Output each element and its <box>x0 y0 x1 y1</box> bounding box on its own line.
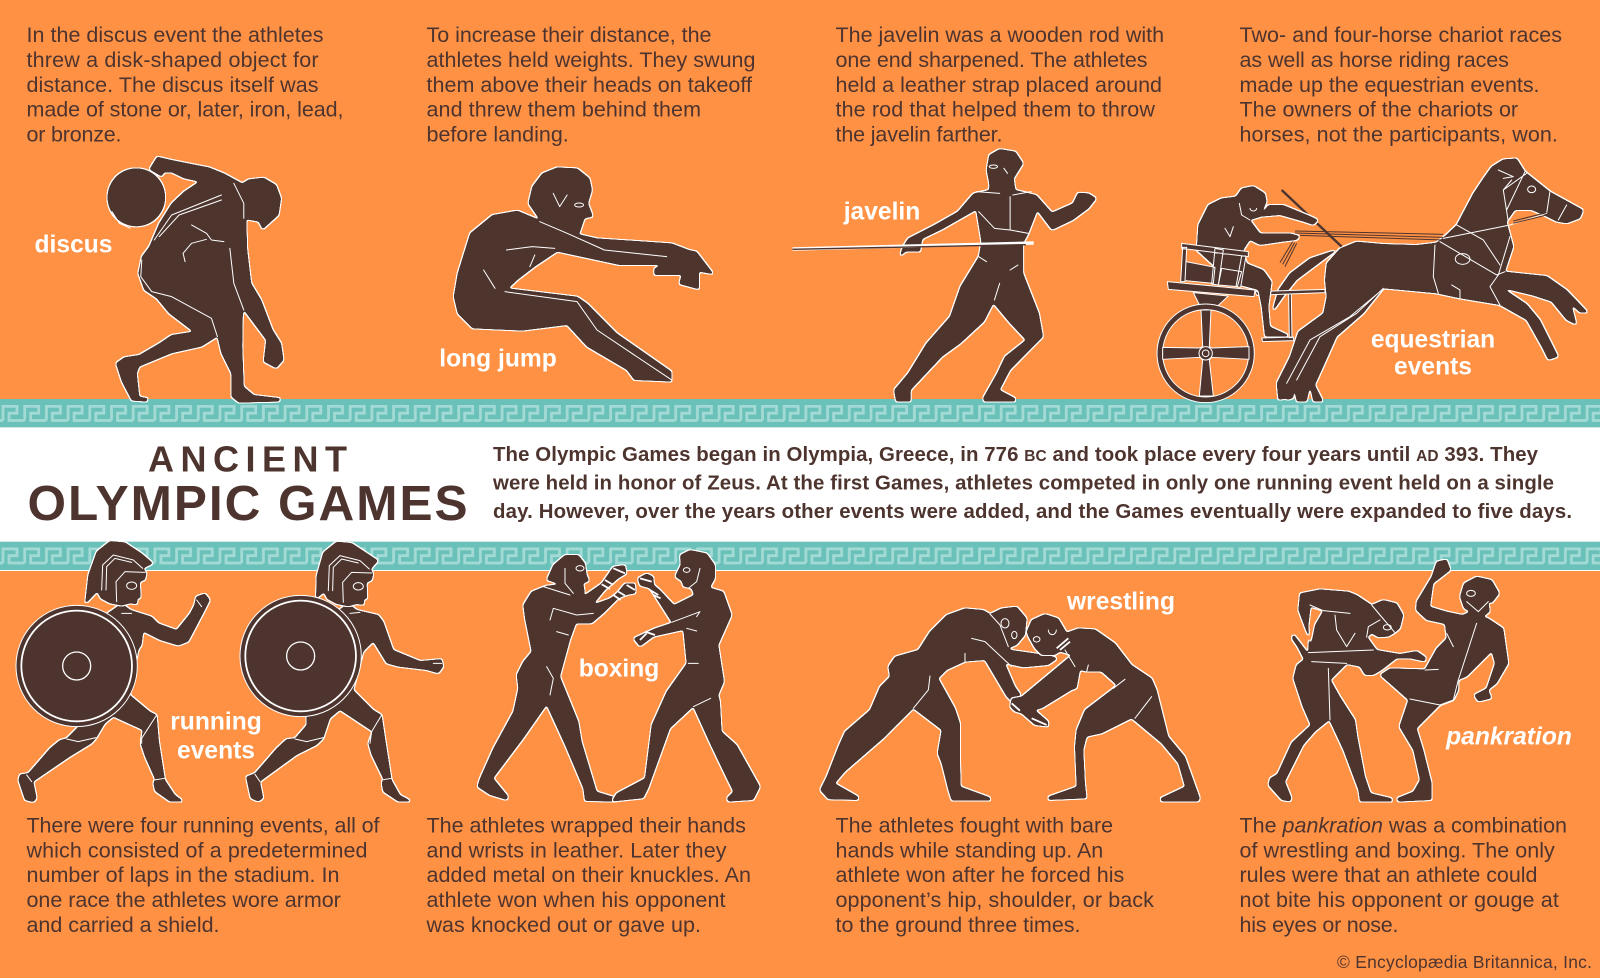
equestrian text: as well as horse riding races <box>1240 48 1509 72</box>
long jump text: To increase their distance, the <box>426 23 712 47</box>
long jump text: before landing. <box>426 123 569 147</box>
heading: Ancient Olympic Games <box>28 438 468 531</box>
intro paragraph: The Olympic Games began in Olympia, Greece, in 776 BC and took place every four years until AD 393. They <box>493 444 1539 466</box>
running text: number of laps in the stadium. In <box>26 863 340 887</box>
equestrian text: Two- and four-horse chariot races <box>1240 23 1562 47</box>
javelin text: the rod that helped them to throw <box>836 98 1155 122</box>
pankration text <box>1240 813 1567 937</box>
label: javelin: javelin <box>843 199 920 226</box>
label: running events: events <box>177 738 255 765</box>
heading: Ancient Olympic Games: ANCIENT <box>148 438 347 480</box>
label: pankration: pankration <box>1445 724 1572 751</box>
horse tail <box>1272 248 1340 313</box>
pankration text: his eyes or nose. <box>1240 913 1398 937</box>
chariot pole and brace <box>1255 289 1325 342</box>
panel: running events <box>16 541 443 937</box>
long jump text: and threw them behind them <box>426 98 701 122</box>
wrestling text: athlete won after he forced his <box>836 863 1124 887</box>
discus text: distance. The discus itself was <box>26 73 318 97</box>
discus text: threw a disk-shaped object for <box>26 48 318 72</box>
panel: equestrian <box>1157 23 1588 403</box>
right wrestler <box>1010 614 1200 802</box>
javelin text: one end sharpened. The athletes <box>836 48 1148 72</box>
label: long jump: long jump <box>439 346 557 373</box>
title band <box>0 399 1600 571</box>
running text: one race the athletes wore armor <box>26 888 341 912</box>
long jump text: athletes held weights. They swung <box>426 48 756 72</box>
javelin text <box>836 23 1164 147</box>
label: discus: discus <box>35 231 112 258</box>
chariot wheel <box>1157 304 1254 403</box>
panel: pankration <box>1240 559 1572 937</box>
figure: wrestlers <box>820 607 1200 802</box>
figure: discus thrower <box>107 157 284 403</box>
label: equestrian events: equestrian <box>1371 326 1495 353</box>
wrestling text: to the ground three times. <box>836 913 1080 937</box>
runner two <box>240 542 443 802</box>
equestrian text: made up the equestrian events. <box>1240 73 1540 97</box>
left fighter <box>1268 589 1426 802</box>
javelin text: the javelin farther. <box>836 123 1002 147</box>
boxing text <box>426 813 751 937</box>
intro paragraph: were held in honor of Zeus. At the first Games, athletes competed in only one running event held on a single <box>492 472 1554 494</box>
equestrian text <box>1240 23 1562 147</box>
figure: javelin thrower <box>793 149 1096 402</box>
label: running events: running <box>170 709 262 736</box>
panel: discus <box>26 23 344 403</box>
hand detail <box>1012 638 1070 725</box>
running text: which consisted of a predetermined <box>26 838 368 862</box>
pankration text: not bite his opponent or gouge at <box>1240 888 1559 912</box>
figure: runners with shields <box>16 541 443 802</box>
javelin text: The javelin was a wooden rod with <box>836 23 1164 47</box>
long jump text: them above their heads on takeoff <box>426 73 752 97</box>
figure: long jumper <box>454 167 714 382</box>
running text <box>26 813 380 937</box>
intro paragraph <box>492 444 1572 523</box>
horse <box>1277 158 1588 402</box>
panel: javelin <box>793 23 1164 402</box>
hand wraps <box>640 578 661 640</box>
running text: There were four running events, all of <box>26 813 380 837</box>
figure: boxers <box>477 550 760 802</box>
heading: Ancient Olympic Games: OLYMPIC GAMES <box>28 476 468 531</box>
wrestling text: hands while standing up. An <box>836 838 1103 862</box>
label: equestrian events: events <box>1394 354 1472 381</box>
chariot frame <box>1167 243 1255 310</box>
driver <box>1197 186 1318 337</box>
pankration text: of wrestling and boxing. The only <box>1240 838 1555 862</box>
figure: chariot and horse <box>1157 158 1588 403</box>
javelin text: held a leather strap placed around <box>836 73 1162 97</box>
boxing text: athlete won when his opponent <box>426 888 726 912</box>
discus text: or bronze. <box>26 123 122 147</box>
javelin spear <box>793 243 1034 249</box>
equestrian text: horses, not the participants, won. <box>1240 123 1558 147</box>
label: wrestling: wrestling <box>1066 589 1175 616</box>
wrestling text: The athletes fought with bare <box>836 813 1113 837</box>
panel: wrestling <box>820 589 1200 937</box>
boxing text: was knocked out or gave up. <box>426 913 701 937</box>
reins and whip <box>1280 190 1547 267</box>
boxing text: The athletes wrapped their hands <box>426 813 746 837</box>
panel: long jump <box>426 23 756 382</box>
boxing text: and wrists in leather. Later they <box>426 838 727 862</box>
label: running events <box>170 709 262 765</box>
pankration text: The pankration was a combination <box>1240 813 1567 837</box>
intro paragraph: day. However, over the years other events were added, and the Games eventually were expanded to five days. <box>493 501 1572 523</box>
runner one <box>16 541 210 802</box>
wrestling text <box>836 813 1154 937</box>
equestrian text: The owners of the chariots or <box>1240 98 1518 122</box>
long jump text <box>426 23 756 147</box>
panel: boxing <box>426 550 760 937</box>
label: boxing: boxing <box>579 656 659 683</box>
wrestling text: opponent’s hip, shoulder, or back <box>836 888 1154 912</box>
hand wraps <box>602 568 635 600</box>
discus text: In the discus event the athletes <box>26 23 324 47</box>
right boxer <box>612 550 760 802</box>
discus text: made of stone or, later, iron, lead, <box>26 98 344 122</box>
left boxer <box>477 555 636 802</box>
running text: and carried a shield. <box>26 913 220 937</box>
right fighter <box>1380 559 1508 802</box>
boxing text: added metal on their knuckles. An <box>426 863 751 887</box>
left wrestler <box>820 607 1058 801</box>
credit: © Encyclopædia Britannica, Inc. <box>1337 952 1592 972</box>
figure: pankration fighters <box>1268 559 1508 802</box>
discus text <box>26 23 344 147</box>
pankration text: rules were that an athlete could <box>1240 863 1538 887</box>
label: equestrian events <box>1371 326 1495 381</box>
